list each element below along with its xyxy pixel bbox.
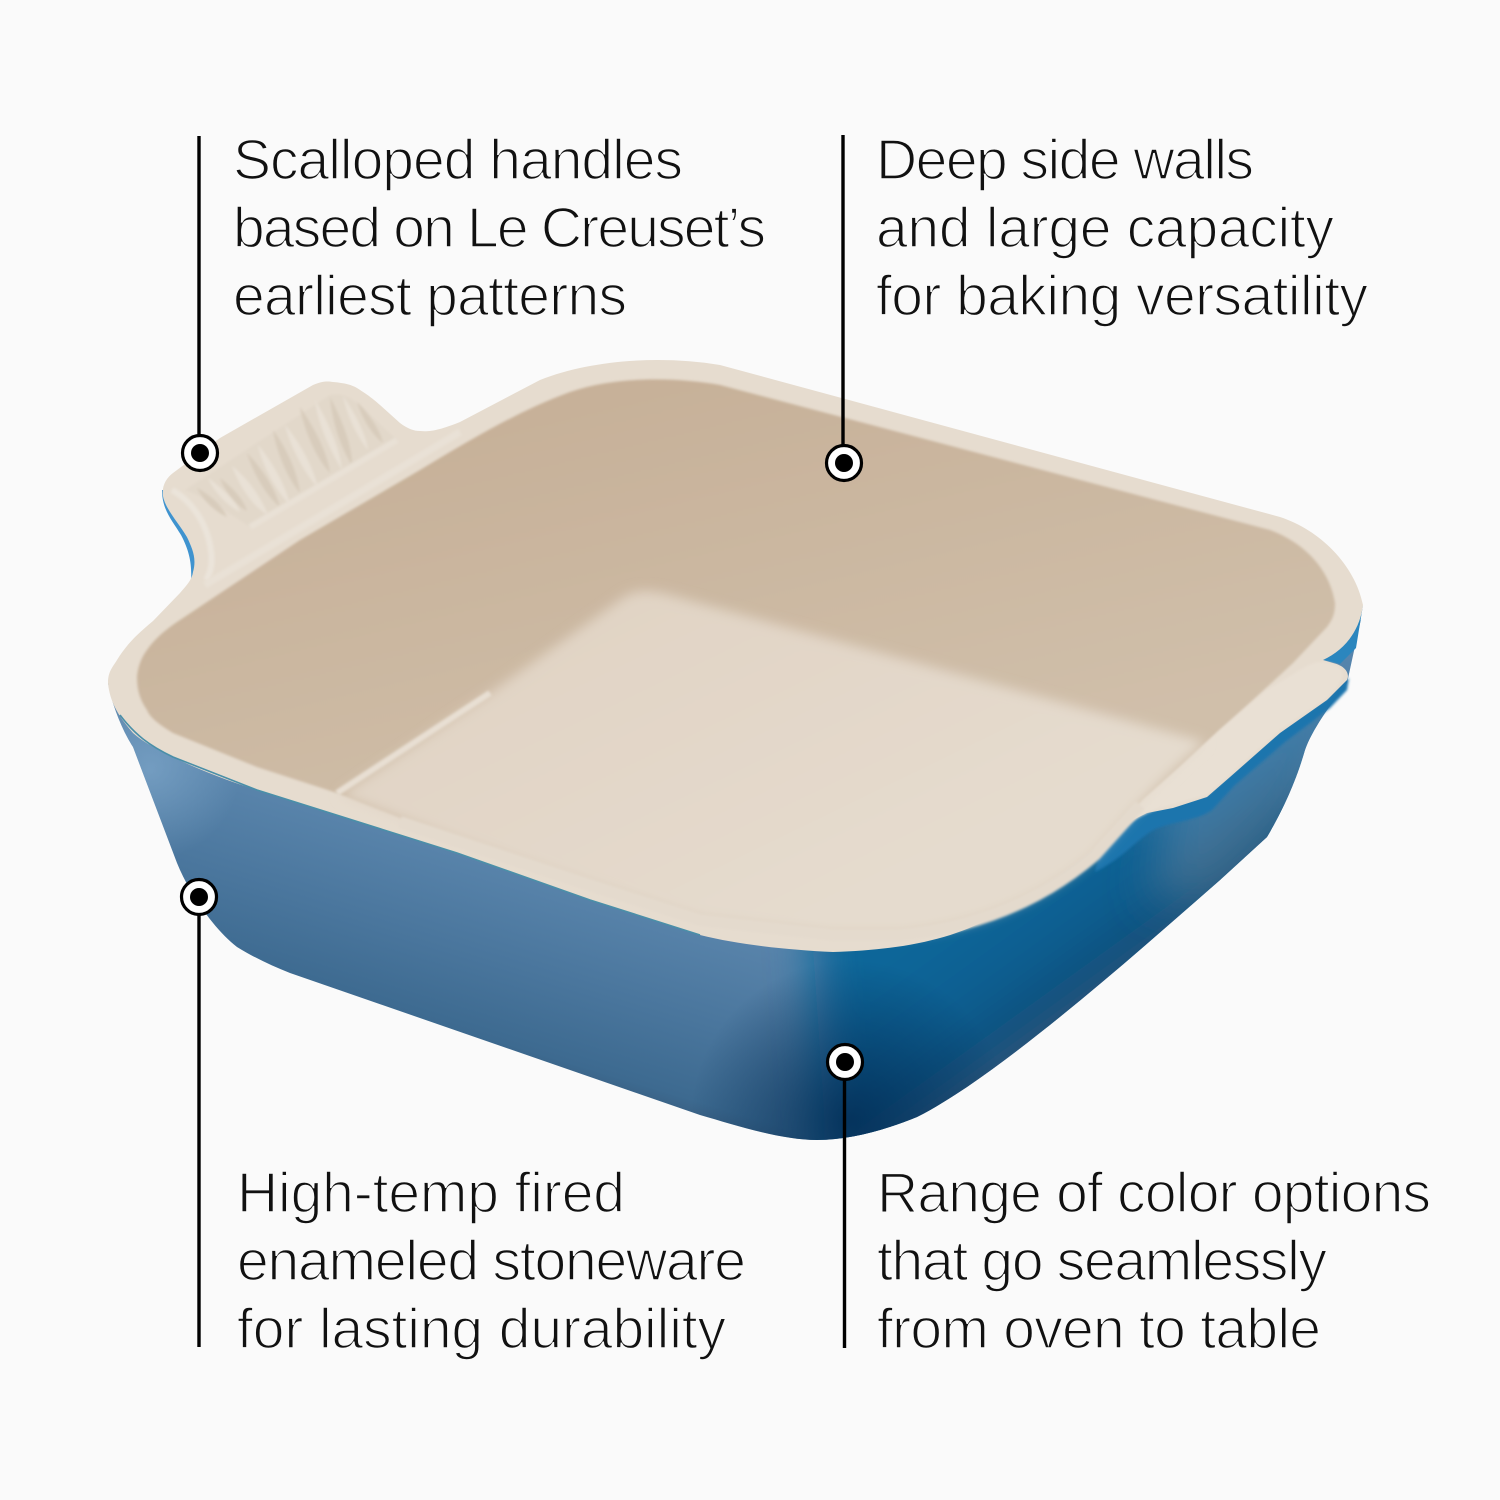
callout text: enameled stoneware (237, 1229, 746, 1293)
callout text: Range of color options (877, 1161, 1431, 1225)
callout text (877, 1161, 1431, 1361)
right handle: cream top surface (1105, 662, 1343, 840)
callout text: for lasting durability (237, 1297, 726, 1361)
callout text (237, 1161, 746, 1361)
callout line (197, 914, 201, 1347)
lower front floor blend (400, 805, 1140, 935)
dish rim: cream glazed edge with handles (108, 360, 1363, 952)
callout: enameled stoneware (182, 880, 746, 1361)
handle outer bevel (172, 490, 212, 580)
callout text: earliest patterns (233, 264, 627, 328)
callout line (841, 135, 845, 447)
callout text (876, 128, 1368, 328)
rib panel (185, 394, 397, 527)
callout line (843, 1079, 846, 1348)
blue glaze edge on left handle (162, 490, 197, 582)
left handle: scalloped ribs (172, 394, 460, 585)
callout line (197, 136, 201, 438)
blue glaze band below right handle (1095, 678, 1349, 872)
dish body: blue enamel exterior (108, 620, 1361, 1140)
callout text: Deep side walls (876, 128, 1254, 192)
floor left edge highlight (337, 693, 490, 793)
callout: scalloped handles (182, 128, 766, 470)
pin marker (826, 446, 862, 480)
dish interior: light flat floor (340, 591, 1205, 935)
callout: color options (828, 1044, 1431, 1361)
pin marker (182, 436, 218, 470)
callout text: based on Le Creuset’s (233, 196, 766, 260)
callout text: for baking versatility (876, 264, 1368, 328)
pin marker (828, 1044, 862, 1080)
dark ribs (197, 397, 383, 517)
blue glaze edge above right handle (1323, 605, 1363, 664)
illustration: blue square baking dish (108, 360, 1363, 1140)
callout text: High-temp fired (237, 1161, 625, 1225)
dish interior: sloped tan walls (137, 379, 1335, 935)
callout text (233, 128, 766, 328)
handle root highlight (205, 432, 460, 585)
panel lower edge (250, 440, 397, 527)
rim lower glaze line (120, 715, 700, 935)
callout text: that go seamlessly (877, 1229, 1328, 1293)
callout text: Scalloped handles (233, 128, 683, 192)
callout text: and large capacity (876, 196, 1334, 260)
light ribs (208, 396, 368, 515)
callout: deep side walls (826, 128, 1368, 480)
callout text: from oven to table (877, 1297, 1321, 1361)
pin marker (182, 880, 216, 914)
